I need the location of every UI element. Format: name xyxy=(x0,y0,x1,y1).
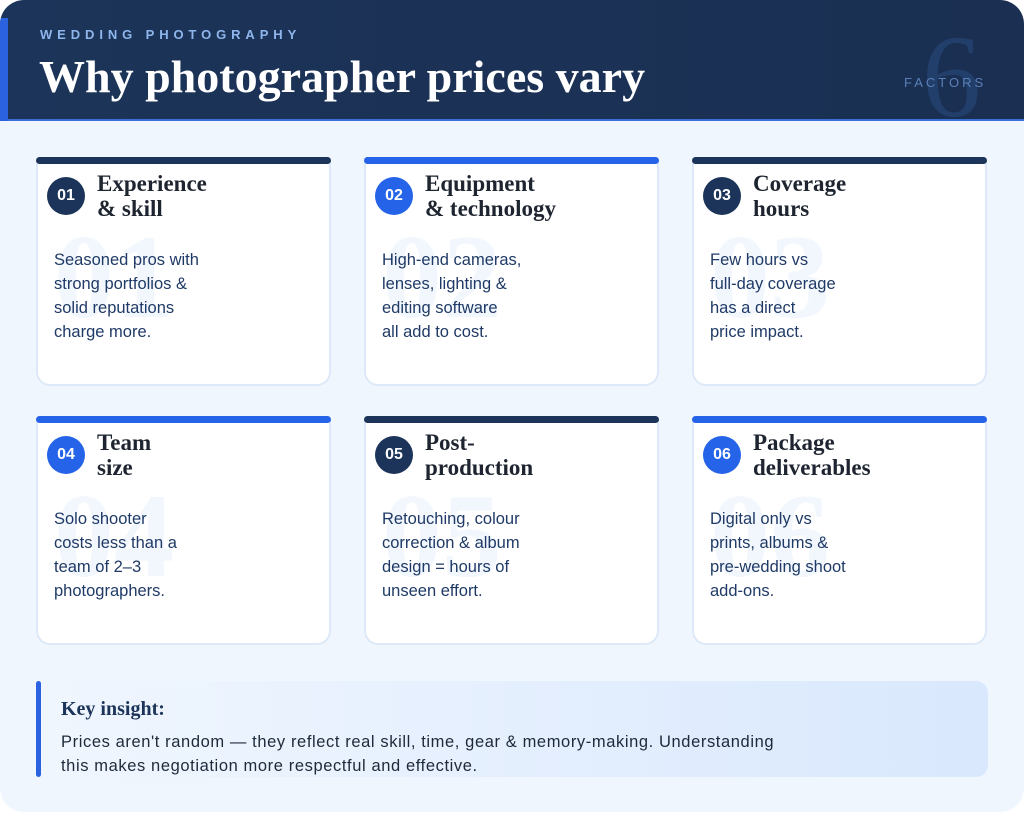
body 04: Solo shooter xyxy=(54,510,147,528)
card 04: 04 xyxy=(54,469,174,602)
heading 06: deliverables xyxy=(753,455,871,480)
badge 04: 04 xyxy=(57,446,75,463)
heading 05: production xyxy=(425,455,533,480)
heading 01: & skill xyxy=(97,196,163,221)
body 02: High-end cameras, xyxy=(382,251,521,269)
heading 01 xyxy=(97,171,207,221)
body 01: strong portfolios & xyxy=(54,275,187,293)
insight heading: Key insight: xyxy=(61,698,165,720)
body 05: correction & album xyxy=(382,534,520,552)
body 06: Digital only vs xyxy=(710,510,812,528)
body 03: Few hours vs xyxy=(710,251,808,269)
card 06 xyxy=(692,416,987,645)
badge 02 xyxy=(375,177,413,215)
body 01: Seasoned pros with xyxy=(54,251,199,269)
insight text: Prices aren't random — they reflect real skill, time, gear & memory-making. Understanding xyxy=(61,733,774,751)
body 06: pre-wedding shoot xyxy=(710,558,846,576)
card 01: 01 xyxy=(54,210,174,343)
heading 05: Post- xyxy=(425,430,475,455)
heading 03 xyxy=(753,171,846,221)
body 03: price impact. xyxy=(710,323,804,341)
header accent bar xyxy=(0,18,8,121)
body 02 xyxy=(382,251,521,341)
big 6: 6 xyxy=(922,11,981,142)
heading 02 xyxy=(425,171,556,221)
heading 04: size xyxy=(97,455,133,480)
heading 01: Experience xyxy=(97,171,207,196)
heading 03: hours xyxy=(753,196,809,221)
body 02: all add to cost. xyxy=(382,323,488,341)
body 01: solid reputations xyxy=(54,299,174,317)
badge 06 xyxy=(703,436,741,474)
body 04 xyxy=(54,510,177,600)
body 02: editing software xyxy=(382,299,498,317)
body 04: photographers. xyxy=(54,582,165,600)
body 05: unseen effort. xyxy=(382,582,483,600)
badge 05 xyxy=(375,436,413,474)
insight text xyxy=(61,733,774,775)
body 06: prints, albums & xyxy=(710,534,828,552)
card 02: 02 xyxy=(382,210,502,343)
body 05: design = hours of xyxy=(382,558,509,576)
badge 06: 06 xyxy=(713,446,731,463)
body 04: team of 2–3 xyxy=(54,558,141,576)
body 06: add-ons. xyxy=(710,582,774,600)
body 03 xyxy=(710,251,836,341)
heading 04 xyxy=(97,430,151,480)
heading 06 xyxy=(753,430,871,480)
card 05 xyxy=(364,416,659,645)
body 01: charge more. xyxy=(54,323,151,341)
badge 04 xyxy=(47,436,85,474)
heading 06: Package xyxy=(753,430,835,455)
card 03 xyxy=(692,157,987,386)
body 01 xyxy=(54,251,199,341)
badge 03 xyxy=(703,177,741,215)
body 03: has a direct xyxy=(710,299,795,317)
header xyxy=(0,0,1024,121)
insight text: this makes negotiation more respectful and effective. xyxy=(61,757,478,775)
key insight callout xyxy=(36,681,988,777)
card 05: 05 xyxy=(382,469,502,602)
heading 05 xyxy=(425,430,533,480)
body 06 xyxy=(710,510,846,600)
badge 02: 02 xyxy=(385,187,403,204)
body 05 xyxy=(382,510,520,600)
heading 04: Team xyxy=(97,430,151,455)
badge 01: 01 xyxy=(57,187,75,204)
card 06: 06 xyxy=(710,469,830,602)
heading 02: Equipment xyxy=(425,171,535,196)
title: Why photographer prices vary xyxy=(39,51,645,102)
kicker: WEDDING PHOTOGRAPHY xyxy=(40,27,301,42)
heading 02: & technology xyxy=(425,196,556,221)
body 02: lenses, lighting & xyxy=(382,275,507,293)
factors label: FACTORS xyxy=(904,75,986,90)
card 04 xyxy=(36,416,331,645)
body 04: costs less than a xyxy=(54,534,177,552)
badge 01 xyxy=(47,177,85,215)
body 05: Retouching, colour xyxy=(382,510,520,528)
body 03: full-day coverage xyxy=(710,275,836,293)
card 02 xyxy=(364,157,659,386)
heading 03: Coverage xyxy=(753,171,846,196)
badge 05: 05 xyxy=(385,446,403,463)
badge 03: 03 xyxy=(713,187,731,204)
card 03: 03 xyxy=(710,210,830,343)
card 01 xyxy=(36,157,331,386)
